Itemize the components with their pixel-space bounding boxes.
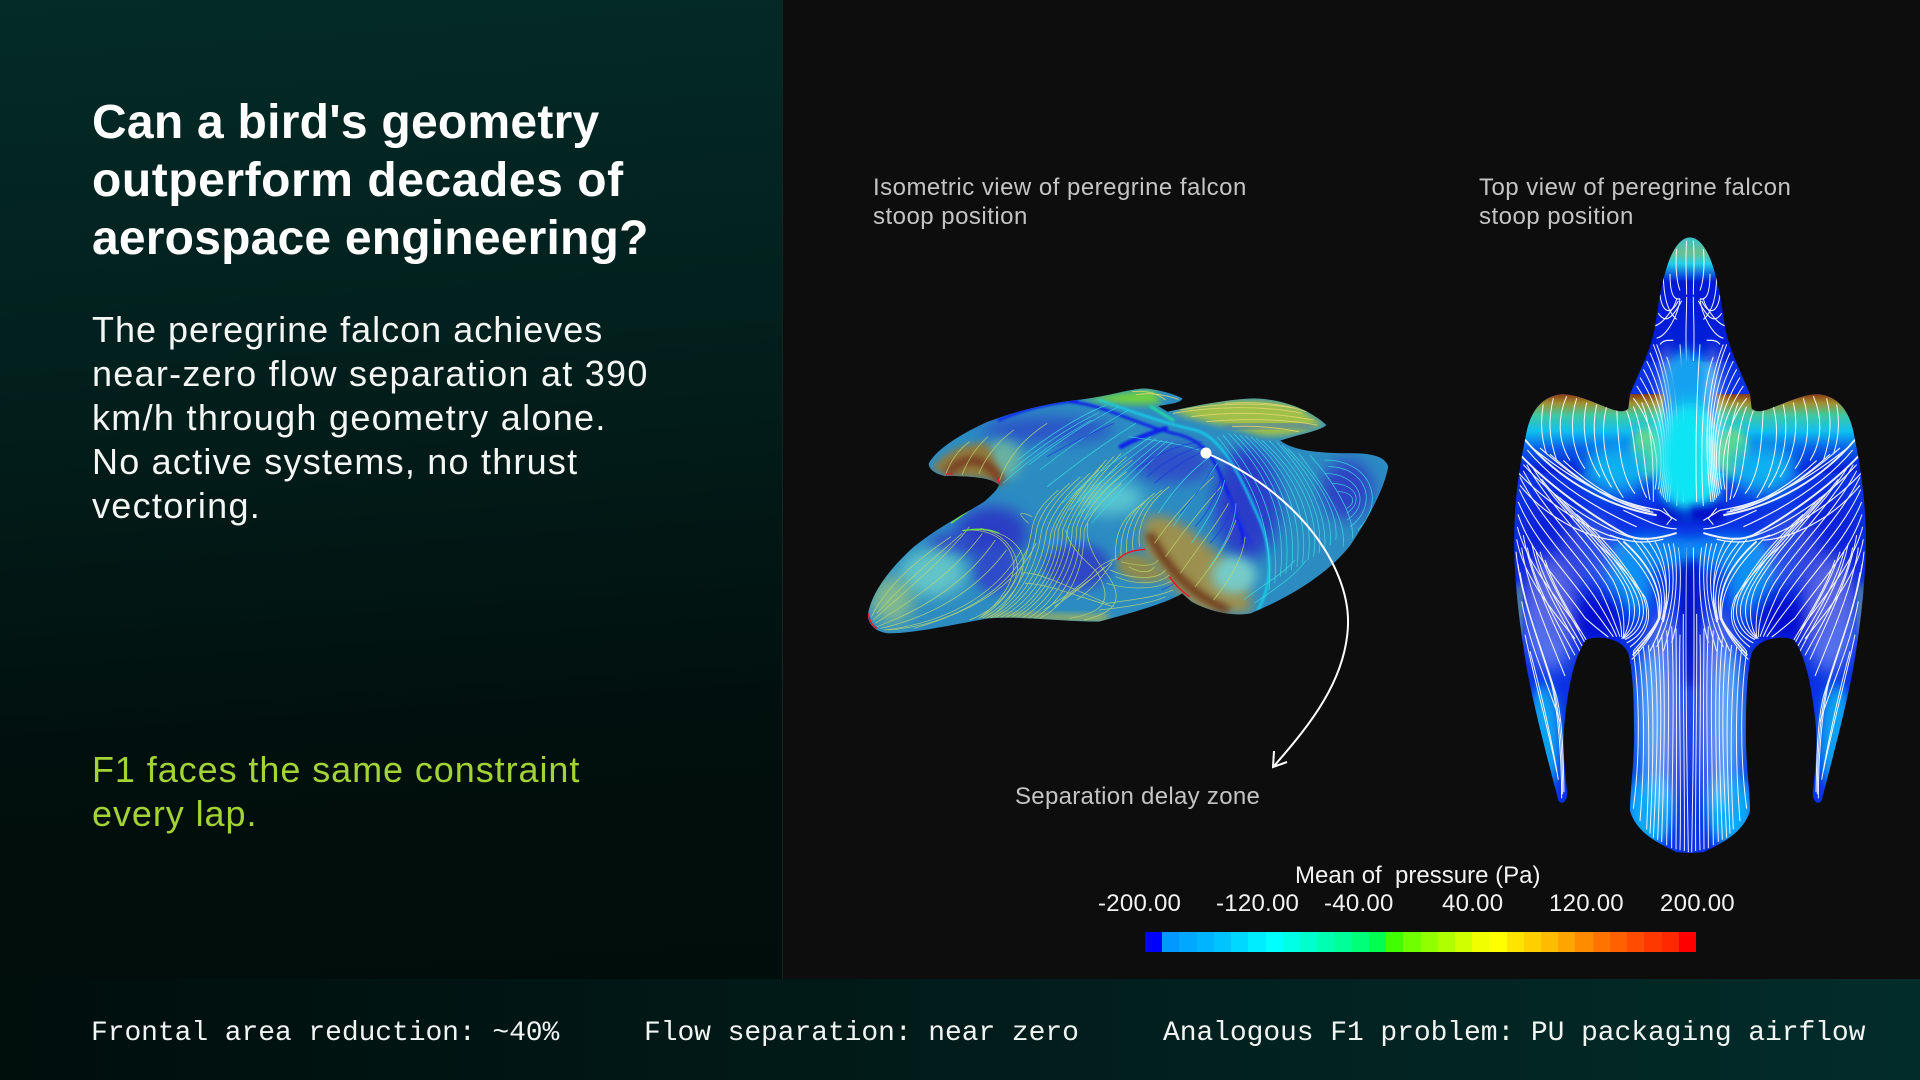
title: aerospace engineering? (92, 212, 649, 265)
text block: falcon explanation: vectoring. (92, 485, 261, 526)
caption: isometric view: stoop position (873, 203, 1028, 230)
panel: bottom stats bar (0, 979, 1920, 1080)
text block: F1 constraint (92, 749, 580, 834)
text block: falcon explanation: No active systems, no thrust (92, 441, 578, 482)
stat: analogous F1 problem: Analogous F1 problem: PU packaging airflow (1163, 1018, 1865, 1049)
legend tick labels: -40.00 (1324, 890, 1394, 917)
caption: isometric view (873, 174, 1247, 230)
caption: isometric view: Isometric view of peregrine falcon (873, 174, 1247, 201)
text block: F1 constraint: every lap. (92, 793, 257, 834)
colour patches (955, 507, 1029, 560)
legend tick labels: 40.00 (1442, 890, 1503, 917)
cyan and teal streamlines (1003, 405, 1372, 603)
isometric falcon render (868, 388, 1388, 634)
top view falcon render (1514, 237, 1866, 854)
legend tick labels: -120.00 (1216, 890, 1299, 917)
stat: frontal area: Frontal area reduction: ~40% (91, 1018, 559, 1049)
yellow-green streamlines (871, 423, 1245, 630)
text block: falcon explanation (92, 309, 649, 526)
legend tick labels: 200.00 (1660, 890, 1735, 917)
title (92, 96, 649, 265)
legend: mean pressure colour scale (1098, 862, 1735, 917)
legend title: Mean of pressure (Pa) (1295, 862, 1540, 889)
panel: question and explanation (0, 0, 783, 979)
bright blue ridge (999, 400, 1269, 610)
legend colour bar (1145, 932, 1696, 952)
caption: top view: Top view of peregrine falcon (1479, 174, 1791, 201)
text block: falcon explanation: near-zero flow separation at 390 (92, 353, 649, 394)
stat: flow separation: Flow separation: near zero (644, 1018, 1079, 1049)
caption: top view (1479, 174, 1791, 230)
caption: top view: stoop position (1479, 203, 1634, 230)
legend tick labels (1098, 890, 1735, 917)
legend tick labels: 120.00 (1549, 890, 1624, 917)
text block: falcon explanation: The peregrine falcon achieves (92, 309, 603, 350)
legend tick labels: -200.00 (1098, 890, 1181, 917)
text block: falcon explanation: km/h through geometry alone. (92, 397, 607, 438)
title: Can a bird's geometry (92, 96, 599, 149)
text block: F1 constraint: F1 faces the same constraint (92, 749, 580, 790)
title: outperform decades of (92, 154, 624, 207)
label: separation delay zone: Separation delay zone (1015, 783, 1260, 810)
